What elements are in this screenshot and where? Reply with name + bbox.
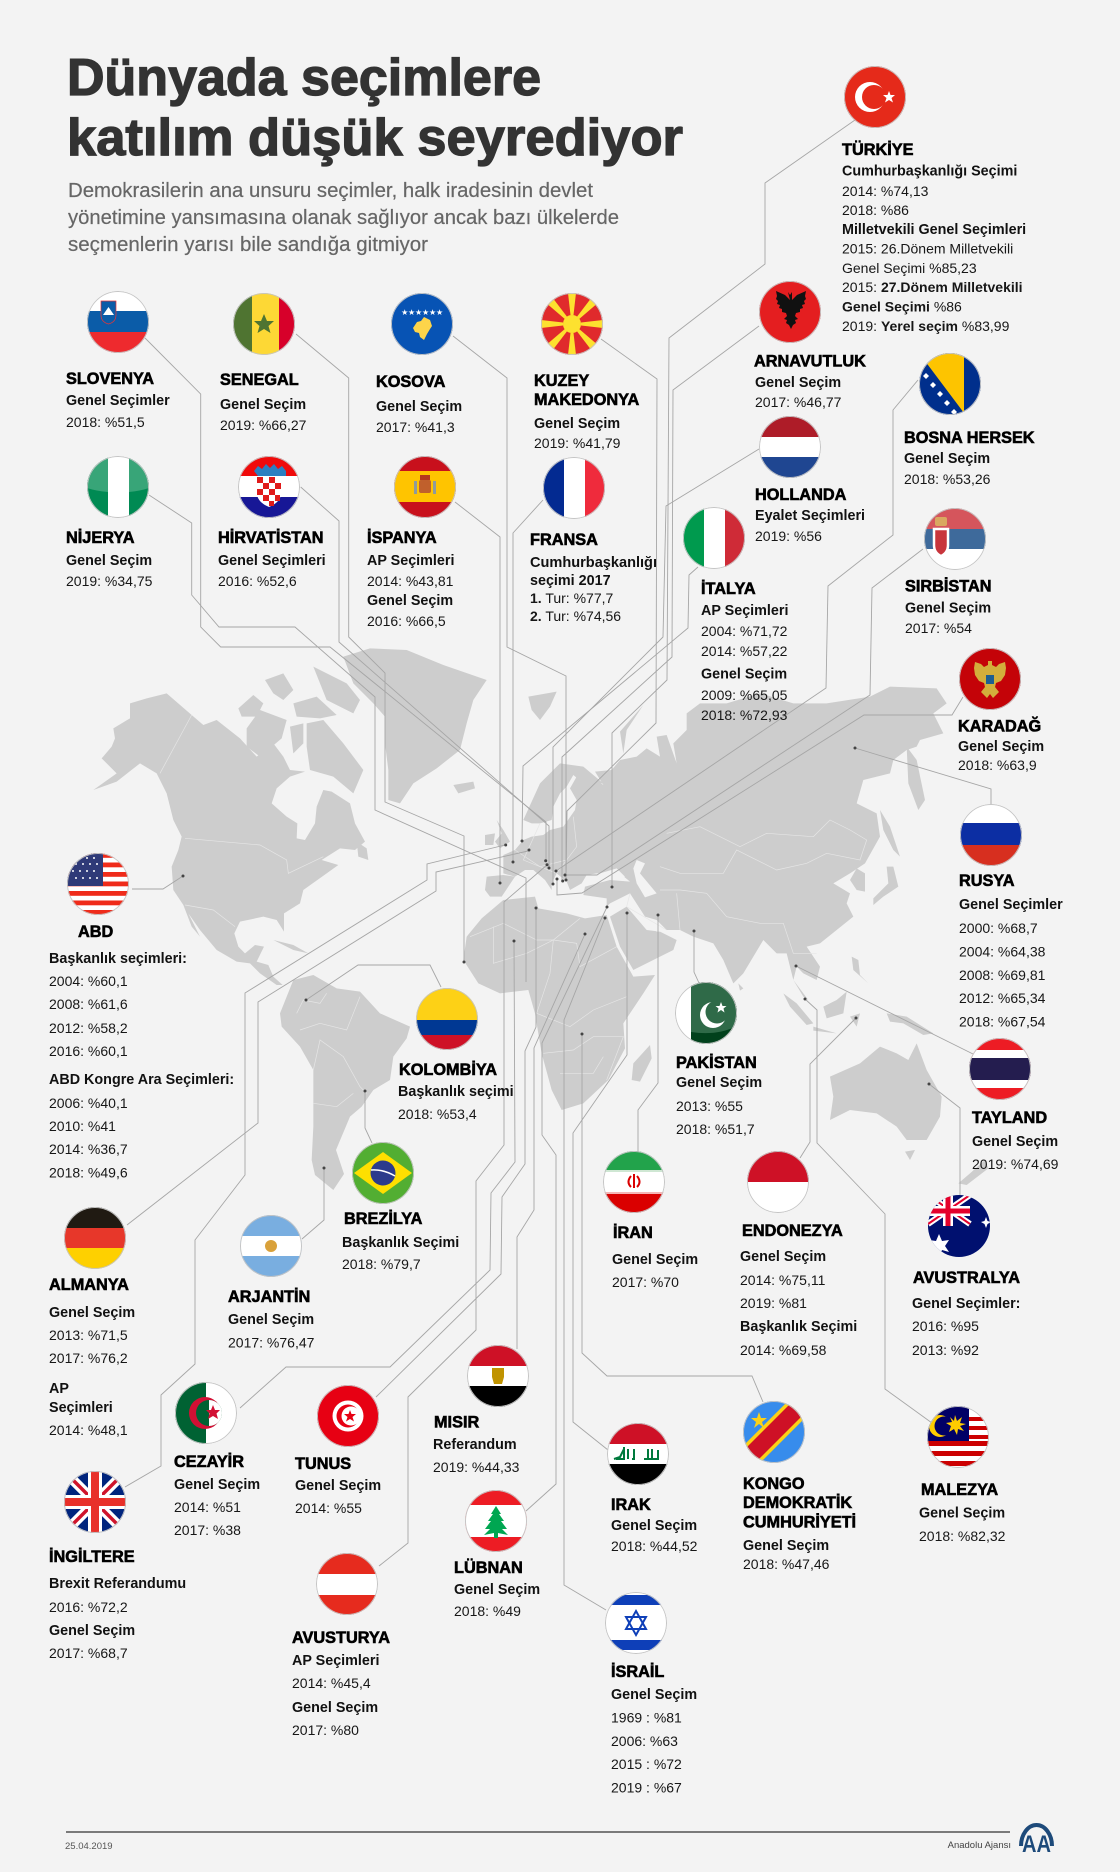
panel: İsrail: 2015 : %72 xyxy=(611,1756,682,1772)
panel: Karadağ xyxy=(958,648,1044,773)
panel: Türkiye: TÜRKİYE xyxy=(842,140,914,159)
panel: Malezya xyxy=(919,1406,1006,1544)
panel: İtalya: 2014: %57,22 xyxy=(701,643,788,659)
panel: Türkiye: Milletvekili Genel Seçimleri xyxy=(842,222,1026,238)
flag: Lebanon xyxy=(465,1490,527,1552)
panel: Arjantin xyxy=(228,1215,315,1350)
panel: Endonezya: 2014: %75,11 xyxy=(740,1272,826,1288)
panel: ABD: 2010: %41 xyxy=(49,1118,116,1134)
panel: Almanya: Genel Seçim xyxy=(49,1305,135,1321)
panel: Bosna Hersek: 2018: %53,26 xyxy=(904,471,991,487)
panel: Irak: Genel Seçim xyxy=(611,1518,697,1534)
panel: Türkiye: 2019: Yerel seçim %83,99 xyxy=(842,318,1010,334)
panel: Irak: IRAK xyxy=(611,1496,651,1514)
panel: Rusya: 2004: %64,38 xyxy=(959,944,1046,960)
panel: İngiltere xyxy=(49,1471,186,1661)
panel: Rusya: 2008: %69,81 xyxy=(959,967,1046,983)
panel: Rusya: 2018: %67,54 xyxy=(959,1014,1046,1030)
panel: İspanya: 2014: %43,81 xyxy=(367,573,454,589)
panel: Mısır xyxy=(433,1345,529,1475)
panel: Sırbistan xyxy=(905,508,992,636)
panel: İspanya xyxy=(367,456,456,629)
panel: Endonezya xyxy=(740,1151,857,1358)
flag: Tunisia xyxy=(317,1385,379,1447)
panel: Türkiye: Genel Seçimi %86 xyxy=(842,298,962,314)
panel: Rusya: Genel Seçimler xyxy=(959,897,1063,913)
panel: Sırbistan: 2017: %54 xyxy=(905,620,972,636)
panel: Kolombiya xyxy=(398,988,514,1122)
panel: Cezayir: CEZAYİR xyxy=(174,1453,244,1471)
panel: ABD: 2018: %49,6 xyxy=(49,1164,128,1180)
panel: Avustralya: AVUSTRALYA xyxy=(913,1269,1020,1287)
panel: ABD: 2006: %40,1 xyxy=(49,1095,128,1111)
panel: Kuzey Makedonya xyxy=(534,293,639,451)
panel: Senegal: SENEGAL xyxy=(220,371,299,389)
panel: ABD: Başkanlık seçimleri: xyxy=(49,951,187,967)
panel: Kosova xyxy=(376,293,462,435)
panel: Nijerya xyxy=(66,456,153,589)
panel: İran xyxy=(603,1151,698,1290)
panel: Brezilya xyxy=(342,1142,459,1272)
panel: ABD xyxy=(49,853,234,1180)
panel: Fransa xyxy=(530,457,657,624)
panel: Arjantin: ARJANTİN xyxy=(228,1288,310,1306)
panel: Mısır: MISIR xyxy=(434,1414,479,1432)
panel: Hırvatistan: HİRVATİSTAN xyxy=(218,529,324,547)
panel: Fransa: 1. Tur: %77,7 xyxy=(530,590,613,606)
panel: Türkiye: 2015: 27.Dönem Milletvekili xyxy=(842,279,1023,295)
panel: Kolombiya: Başkanlık seçimi xyxy=(398,1084,514,1100)
panel: Almanya: AP xyxy=(49,1381,69,1397)
subtitle: seçmenlerin yarısı bile sandığa gitmiyor xyxy=(68,234,428,256)
panel: Pakistan: 2018: %51,7 xyxy=(676,1121,755,1137)
flag: Pakistan xyxy=(675,982,737,1044)
panel: Avusturya: AP Seçimleri xyxy=(292,1653,379,1669)
flag: Austria xyxy=(316,1553,378,1615)
panel: Nijerya: 2019: %34,75 xyxy=(66,573,153,589)
panel: Lübnan: 2018: %49 xyxy=(454,1603,521,1619)
panel: Avusturya: Genel Seçim xyxy=(292,1700,378,1716)
panel: Hollanda: Eyalet Seçimleri xyxy=(755,508,865,524)
panel: Arjantin: 2017: %76,47 xyxy=(228,1334,315,1350)
panel: Avustralya: 2013: %92 xyxy=(912,1342,979,1358)
panel: İsrail: İSRAİL xyxy=(611,1663,664,1681)
panel: Hollanda: HOLLANDA xyxy=(755,486,847,504)
panel: Kuzey Makedonya: 2019: %41,79 xyxy=(534,435,621,451)
flag: DR Congo xyxy=(743,1401,805,1463)
panel: İtalya: AP Seçimleri xyxy=(701,603,788,619)
flag: Italy xyxy=(683,507,745,569)
panel: Kosova: Genel Seçim xyxy=(376,399,462,415)
panel: Sırbistan: Genel Seçim xyxy=(905,600,991,616)
panel: Tayland xyxy=(969,1038,1059,1172)
flag: France xyxy=(543,457,605,519)
panel: Pakistan: Genel Seçim xyxy=(676,1075,762,1091)
panel: Cezayir: Genel Seçim xyxy=(174,1477,260,1493)
panel: ABD: ABD Kongre Ara Seçimleri: xyxy=(49,1072,234,1088)
panel: ABD: 2012: %58,2 xyxy=(49,1020,128,1036)
panel: İspanya: AP Seçimleri xyxy=(367,553,454,569)
flag: Nigeria xyxy=(87,456,149,518)
flag: Kosovo xyxy=(391,293,453,355)
flag: Israel xyxy=(605,1592,667,1654)
panel: Türkiye: 2018: %86 xyxy=(842,202,909,218)
flag: Malaysia xyxy=(927,1406,989,1468)
panel: Avustralya: Genel Seçimler: xyxy=(912,1296,1020,1312)
panel: Tayland: 2019: %74,69 xyxy=(972,1156,1059,1172)
panel: İsrail: Genel Seçim xyxy=(611,1687,697,1703)
panel: Tayland: Genel Seçim xyxy=(972,1134,1058,1150)
panel: Cezayir: 2017: %38 xyxy=(174,1522,241,1538)
panel: Tunus: TUNUS xyxy=(295,1455,351,1473)
panel: Kongo Demokratik Cumhuriyeti: 2018: %47,46 xyxy=(743,1556,830,1572)
title xyxy=(67,49,683,167)
panel: Almanya xyxy=(49,1207,135,1438)
flag: Thailand xyxy=(969,1038,1031,1100)
panel: Avustralya: 2016: %95 xyxy=(912,1318,979,1334)
panel: Tunus: Genel Seçim xyxy=(295,1478,381,1494)
panel: Nijerya: NİJERYA xyxy=(66,529,135,547)
panel: Kosova: 2017: %41,3 xyxy=(376,419,455,435)
panel: Pakistan xyxy=(675,982,762,1137)
flag: Russia xyxy=(960,804,1022,866)
panel: İtalya: 2018: %72,93 xyxy=(701,707,788,723)
panel: Arnavutluk: 2017: %46,77 xyxy=(755,394,842,410)
panel: İspanya: İSPANYA xyxy=(367,529,437,547)
panel: Fransa: seçimi 2017 xyxy=(530,573,611,589)
flag: Germany xyxy=(64,1207,126,1269)
panel: Kolombiya: KOLOMBİYA xyxy=(399,1061,497,1079)
panel: Almanya: 2014: %48,1 xyxy=(49,1422,128,1438)
flag: Kosovo: ★★★★★★ xyxy=(401,308,443,317)
panel: ABD: 2014: %36,7 xyxy=(49,1141,128,1157)
flag: Netherlands xyxy=(759,416,821,478)
map location dots xyxy=(182,746,930,1170)
flag: Slovenia xyxy=(87,291,149,353)
panel: ABD: 2008: %61,6 xyxy=(49,996,128,1012)
panel: Kongo Demokratik Cumhuriyeti: CUMHURİYETİ xyxy=(743,1514,856,1532)
panel: Kongo Demokratik Cumhuriyeti: Genel Seçim xyxy=(743,1538,829,1554)
panel: Slovenya: 2018: %51,5 xyxy=(66,414,145,430)
panel: Sırbistan: SIRBİSTAN xyxy=(905,578,992,596)
panel: Türkiye: 2014: %74,13 xyxy=(842,183,929,199)
panel: Arnavutluk: ARNAVUTLUK xyxy=(754,352,866,370)
panel: Kolombiya: 2018: %53,4 xyxy=(398,1106,477,1122)
panel: Brezilya: BREZİLYA xyxy=(344,1210,423,1228)
flag: Algeria xyxy=(175,1382,237,1444)
panel: Almanya: Seçimleri xyxy=(49,1400,113,1416)
date: 25.04.2019 xyxy=(65,1841,113,1852)
panel: ABD: 2016: %60,1 xyxy=(49,1043,128,1059)
panel: İngiltere: 2017: %68,7 xyxy=(49,1645,128,1661)
flag: Argentina xyxy=(240,1215,302,1277)
subtitle: yönetimine yansımasına olanak sağlıyor ancak bazı ülkelerde xyxy=(68,207,619,229)
panel: Endonezya: 2019: %81 xyxy=(740,1295,807,1311)
flag: Bosnia xyxy=(919,353,981,415)
flag: Indonesia xyxy=(747,1151,809,1213)
panel: İran: Genel Seçim xyxy=(612,1252,698,1268)
flag: Senegal xyxy=(233,293,295,355)
flag: UK xyxy=(64,1471,126,1533)
panel: Bosna Hersek: Genel Seçim xyxy=(904,451,990,467)
panel: İtalya xyxy=(683,507,788,723)
flag: Croatia xyxy=(238,456,300,518)
panel: Rusya: RUSYA xyxy=(959,872,1015,890)
icon: Anadolu Agency logo: AA xyxy=(1022,1831,1051,1858)
panel: Türkiye: 2015: 26.Dönem Milletvekili xyxy=(842,240,1013,256)
source: Anadolu Ajansı xyxy=(948,1840,1011,1851)
panel: Endonezya: Genel Seçim xyxy=(740,1249,826,1265)
panel: Hırvatistan xyxy=(218,456,326,589)
panel: Hollanda: 2019: %56 xyxy=(755,528,822,544)
panel: Türkiye xyxy=(842,66,1026,334)
panel: Hırvatistan: Genel Seçimleri xyxy=(218,553,326,569)
panel: Lübnan: LÜBNAN xyxy=(454,1558,523,1577)
panel: Senegal xyxy=(220,293,307,433)
subtitle xyxy=(68,180,619,256)
panel: Irak xyxy=(607,1423,698,1554)
panel: Avustralya xyxy=(912,1195,1020,1358)
panel: Mısır: 2019: %44,33 xyxy=(433,1459,520,1475)
panel: Senegal: Genel Seçim xyxy=(220,397,306,413)
panel: Kuzey Makedonya: Genel Seçim xyxy=(534,416,620,432)
panel: Türkiye: Genel Seçimi %85,23 xyxy=(842,260,977,276)
flag: Australia xyxy=(928,1195,991,1257)
panel: Slovenya xyxy=(66,291,170,430)
panel: Karadağ: KARADAĞ xyxy=(958,716,1041,736)
panel: İngiltere: 2016: %72,2 xyxy=(49,1599,128,1615)
flag: Brazil xyxy=(352,1142,414,1204)
panel: Bosna Hersek xyxy=(904,353,1035,487)
panel: Rusya xyxy=(959,804,1063,1030)
panel: Bosna Hersek: BOSNA HERSEK xyxy=(904,429,1035,447)
panel: İsrail xyxy=(605,1592,697,1796)
panel: Arnavutluk xyxy=(754,281,866,410)
panel: Avusturya: AVUSTURYA xyxy=(292,1629,390,1647)
panel: Tunus xyxy=(295,1385,381,1516)
title: katılım düşük seyrediyor xyxy=(67,109,683,167)
title: Dünyada seçimlere xyxy=(67,49,541,107)
flag: Spain xyxy=(394,456,456,518)
panel: İtalya: Genel Seçim xyxy=(701,666,787,682)
panel: İtalya: 2009: %65,05 xyxy=(701,687,788,703)
panel: İngiltere: Genel Seçim xyxy=(49,1623,135,1639)
panel: Nijerya: Genel Seçim xyxy=(66,553,152,569)
leader lines connecting flags to map points xyxy=(125,120,991,1610)
panel: Irak: 2018: %44,52 xyxy=(611,1538,698,1554)
flag: Colombia xyxy=(416,988,478,1050)
panel: Almanya: 2013: %71,5 xyxy=(49,1327,128,1343)
flag: Iraq xyxy=(607,1423,669,1485)
panel: İtalya: İTALYA xyxy=(701,580,756,598)
panel: Brezilya: Başkanlık Seçimi xyxy=(342,1235,459,1251)
panel: İran: 2017: %70 xyxy=(612,1274,679,1290)
panel: Endonezya: Başkanlık Seçimi xyxy=(740,1319,857,1335)
panel: Tunus: 2014: %55 xyxy=(295,1500,362,1516)
flag: Montenegro xyxy=(959,648,1021,710)
panel: İngiltere: İNGİLTERE xyxy=(49,1548,135,1566)
panel: Avusturya xyxy=(292,1553,390,1738)
panel: Tayland: TAYLAND xyxy=(972,1109,1047,1127)
panel: İspanya: 2016: %66,5 xyxy=(367,613,446,629)
panel: Almanya: ALMANYA xyxy=(49,1276,129,1294)
panel: İtalya: 2004: %71,72 xyxy=(701,623,788,639)
panel: Karadağ: 2018: %63,9 xyxy=(958,757,1037,773)
panel: Rusya: 2000: %68,7 xyxy=(959,920,1038,936)
panel: Avusturya: 2014: %45,4 xyxy=(292,1675,371,1691)
panel: Pakistan: 2013: %55 xyxy=(676,1098,743,1114)
panel: Slovenya: SLOVENYA xyxy=(66,370,154,388)
panel: Kongo Demokratik Cumhuriyeti xyxy=(743,1401,856,1572)
panel: Malezya: Genel Seçim xyxy=(919,1506,1005,1522)
panel: İsrail: 1969 : %81 xyxy=(611,1710,682,1726)
flag: Serbia xyxy=(924,508,986,570)
panel: Fransa: 2. Tur: %74,56 xyxy=(530,608,621,624)
footer xyxy=(65,1825,1052,1858)
flag: North Macedonia xyxy=(541,293,603,355)
panel: Senegal: 2019: %66,27 xyxy=(220,417,307,433)
panel: İngiltere: Brexit Referandumu xyxy=(49,1576,186,1592)
panel: Malezya: MALEZYA xyxy=(921,1481,998,1499)
flag: USA xyxy=(67,853,129,915)
panel: Pakistan: PAKİSTAN xyxy=(676,1054,757,1072)
flag: Albania xyxy=(759,281,821,343)
flag: Turkey xyxy=(844,66,906,128)
panel: Endonezya: ENDONEZYA xyxy=(742,1222,843,1240)
panel: Slovenya: Genel Seçimler xyxy=(66,393,170,409)
panel: Lübnan xyxy=(454,1490,540,1619)
panel: İsrail: 2019 : %67 xyxy=(611,1780,682,1796)
panel: Avusturya: 2017: %80 xyxy=(292,1722,359,1738)
panel: Rusya: 2012: %65,34 xyxy=(959,990,1046,1006)
world map xyxy=(93,648,988,1190)
panel: Kuzey Makedonya: KUZEY xyxy=(534,372,589,390)
flag: Egypt xyxy=(467,1345,529,1407)
panel: Arnavutluk: Genel Seçim xyxy=(755,375,841,391)
panel: ABD: 2004: %60,1 xyxy=(49,973,128,989)
panel: Malezya: 2018: %82,32 xyxy=(919,1528,1006,1544)
panel: Hollanda xyxy=(755,416,865,544)
flag: Iran xyxy=(603,1151,665,1213)
panel: Fransa: FRANSA xyxy=(530,531,598,549)
panel: İran: İRAN xyxy=(613,1224,653,1242)
panel: Kongo Demokratik Cumhuriyeti: KONGO xyxy=(743,1475,805,1493)
panel: Endonezya: 2014: %69,58 xyxy=(740,1342,827,1358)
panel: Karadağ: Genel Seçim xyxy=(958,739,1044,755)
panel: Türkiye: Cumhurbaşkanlığı Seçimi xyxy=(842,164,1017,180)
panel: Kuzey Makedonya: MAKEDONYA xyxy=(534,391,639,409)
panel: İspanya: Genel Seçim xyxy=(367,593,453,609)
subtitle: Demokrasilerin ana unsuru seçimler, halk iradesinin devlet xyxy=(68,180,593,202)
panel: Kosova: KOSOVA xyxy=(376,373,446,391)
panel: Cezayir xyxy=(174,1382,260,1538)
panel: Brezilya: 2018: %79,7 xyxy=(342,1256,421,1272)
panel: Almanya: 2017: %76,2 xyxy=(49,1350,128,1366)
panel: ABD: ABD xyxy=(78,923,114,941)
panel: Fransa: Cumhurbaşkanlığı xyxy=(530,555,657,571)
panel: Kongo Demokratik Cumhuriyeti: DEMOKRATİK xyxy=(743,1494,852,1512)
panel: Cezayir: 2014: %51 xyxy=(174,1499,241,1515)
panel: Hırvatistan: 2016: %52,6 xyxy=(218,573,297,589)
panel: Lübnan: Genel Seçim xyxy=(454,1582,540,1598)
panel: Arjantin: Genel Seçim xyxy=(228,1312,314,1328)
panel: İsrail: 2006: %63 xyxy=(611,1733,678,1749)
panel: Mısır: Referandum xyxy=(433,1437,517,1453)
